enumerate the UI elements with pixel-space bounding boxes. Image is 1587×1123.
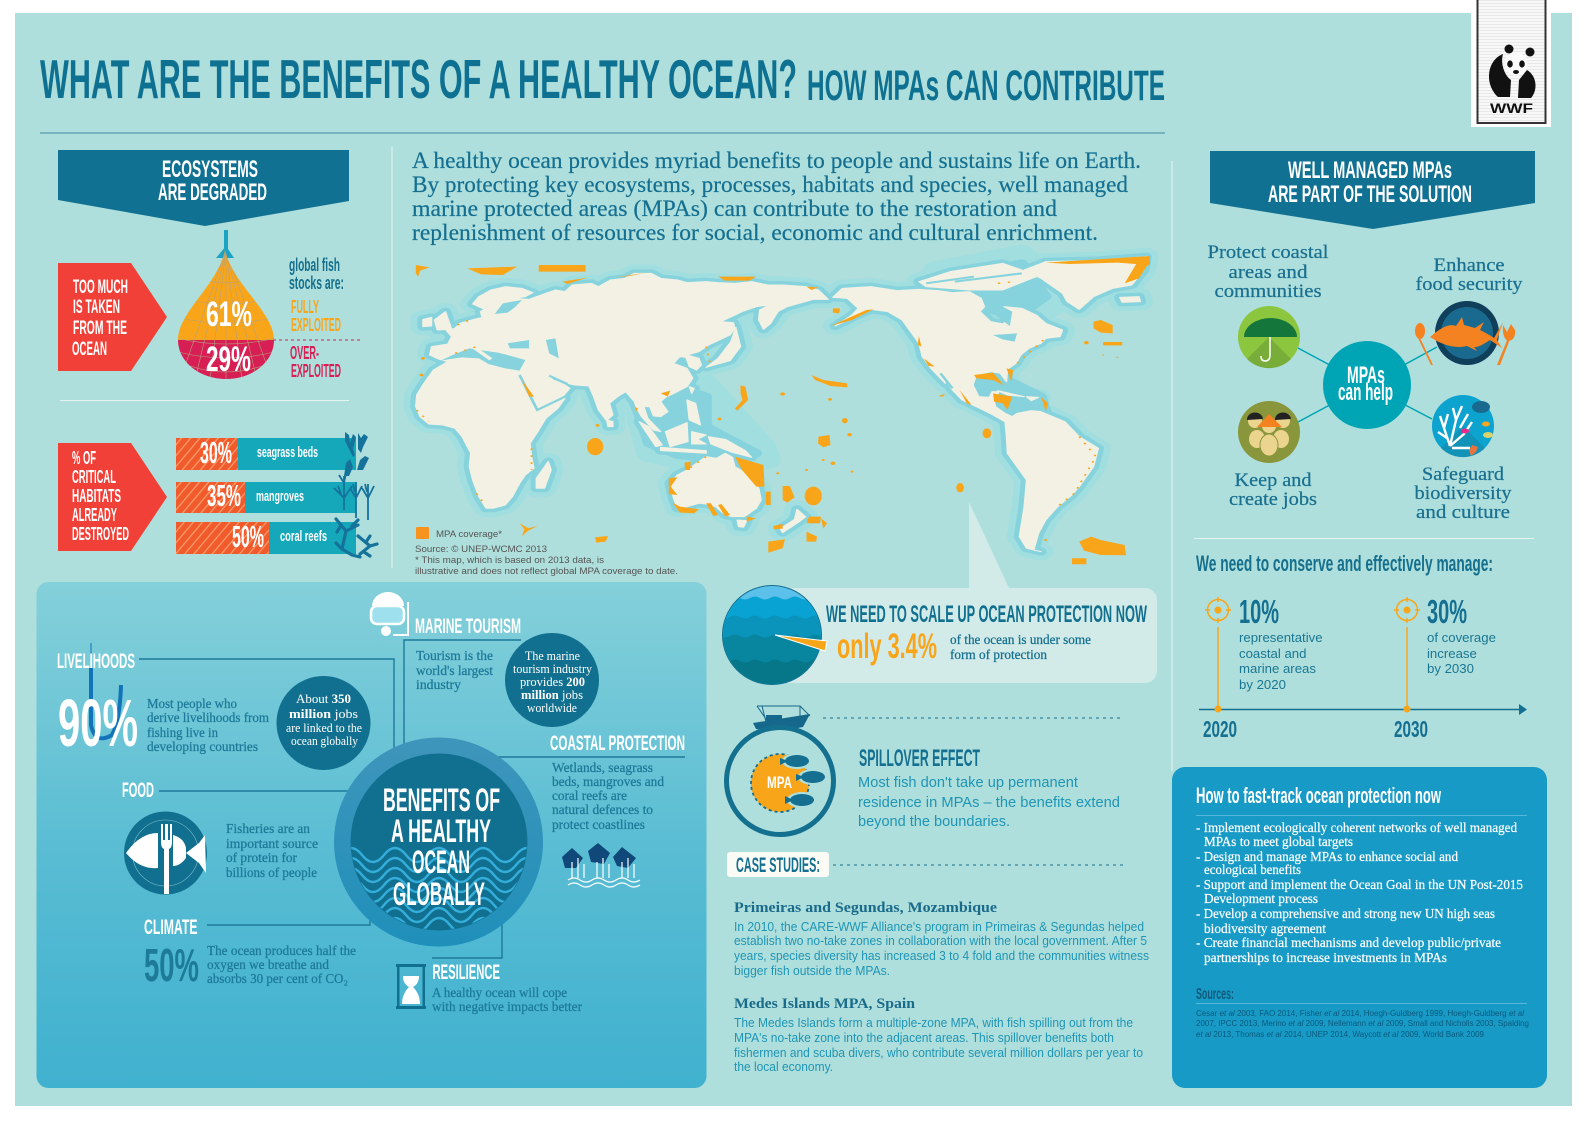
food [122,779,318,894]
callout: scale up ocean protection: only 3.4% [837,627,937,666]
icon: coral and turtle [1432,395,1494,457]
central circle: GLOBALLY [393,876,485,912]
case study: Mozambique: Primeiras and Segundas, Mozambique [734,900,998,916]
fishing net chart: 61% [206,295,252,334]
case study: Mozambique: bigger fish outside the MPAs. [734,964,890,978]
bar: coral reefs: 50% [232,519,264,554]
panel: benefits of a healthy ocean [36,582,706,1088]
pie chart: 3.4% [720,585,830,690]
targets timeline: 10% [1239,593,1279,630]
intro text: replenishment of resources for social, economic and cultural enrichment. [412,220,1098,245]
arrow: too much is taken: FROM THE [73,318,127,339]
climate: The ocean produces half the [207,943,356,958]
benefit: food security: Enhance [1434,255,1504,276]
action list: - Create financial mechanisms and develop public/private [1196,936,1501,951]
stat bubble: 200 million jobs: million jobs [521,688,583,702]
title: HOW MPAs CAN CONTRIBUTE [807,62,1165,110]
fish stock labels: EXPLOITED [291,315,341,335]
livelihoods: developing countries [147,739,258,754]
benefit: biodiversity [1414,395,1512,523]
bar: seagrass beds: seagrass beds [257,444,318,461]
targets timeline: 2030 [1394,716,1428,742]
livelihoods [57,643,370,770]
banner: ecosystems: ARE DEGRADED [158,179,267,206]
stat bubble: 350 million jobs [276,676,370,770]
icon: fish on plate [124,812,207,894]
food: FOOD [122,779,154,802]
hub: MPAs can help: MPAs [1347,362,1385,389]
benefit: protect coastal areas: communities [1214,281,1322,302]
icon: hourglass [396,964,426,1009]
icon: umbrella [1238,306,1300,368]
intro text [412,148,1141,245]
benefit: biodiversity: biodiversity [1414,483,1512,504]
arrow: critical habitats destroyed: CRITICAL [72,467,116,487]
map legend [415,527,678,576]
targets timeline: representative [1239,630,1323,645]
arrow: critical habitats destroyed: % OF [72,448,96,468]
case study: Mozambique: In 2010, the CARE-WWF Alliance's program in Primeiras & Segundas helped [734,920,1144,934]
case study: Mozambique [734,900,1149,978]
livelihoods: fishing live in [147,725,218,740]
arrow: critical habitats destroyed: ALREADY [72,505,117,525]
banner: solution: WELL MANAGED MPAs [1288,157,1452,184]
map legend: * This map, which is based on 2013 data, is [415,555,604,565]
callout: scale up ocean protection [720,502,1157,690]
central circle [334,738,543,946]
action list [1196,821,1523,966]
action list: ecological benefits [1204,863,1301,878]
benefit: food security [1415,255,1523,365]
stat bubble: 200 million jobs: provides 200 [520,675,585,689]
icon: houses in wetlands [562,843,640,887]
benefit: protect coastal areas: areas and [1228,262,1308,283]
action list: MPAs to meet global targets [1204,835,1353,850]
targets timeline: of coverage [1427,630,1496,645]
arrow: critical habitats destroyed [58,443,167,551]
case studies: CASE STUDIES: [736,854,820,877]
stat bubble: 200 million jobs: The marine [525,649,580,663]
central circle: BENEFITS OF [383,782,500,818]
benefit: protect coastal areas [1208,242,1328,368]
targets timeline: by 2020 [1239,677,1286,692]
hub: MPAs can help [1323,341,1411,429]
case study: Spain: MPA's no-take zone into the adjacent areas. This spillover benefits both [734,1031,1114,1045]
stat bubble: 350 million jobs: million jobs [289,706,358,721]
case study: Mozambique: establish two no-take zones in collaboration with the local government. After 5 [734,934,1147,948]
fish stock labels: stocks are: [289,273,344,293]
climate: CLIMATE [144,916,198,939]
fish stock labels [273,255,360,381]
arrow: critical habitats destroyed: HABITATS [72,486,121,506]
icon: fish plate [1415,301,1515,365]
benefit: jobs: Keep and [1234,470,1312,491]
spillover effect: residence in MPAs – the benefits extend [858,794,1120,811]
food: of protein for [226,850,297,865]
case study: Spain: The Medes Islands form a multiple-zone MPA, with fish spilling out from the [734,1016,1133,1030]
case study: Spain [734,996,1143,1074]
stat bubble: 200 million jobs: worldwide [527,701,577,715]
arrow: too much is taken [58,263,167,371]
coastal protection: beds, mangroves and [552,774,664,789]
title: WHAT ARE THE BENEFITS OF A HEALTHY OCEAN? [40,48,797,110]
fish stock labels: EXPLOITED [291,361,341,381]
livelihoods: Most people who [147,696,237,711]
coastal protection [550,732,685,887]
benefit: biodiversity: Safeguard [1422,464,1505,485]
banner: solution [1210,151,1535,229]
bar: seagrass beds [176,432,369,476]
food: important source [226,836,318,851]
banner: ecosystems [58,150,349,226]
logo: WWF panda: WWF [1490,100,1534,116]
sources: et al 2013, Thomas et al 2014, UNEP 2014, Waycott et al 2009, World Bank 2009 [1196,1030,1484,1039]
map legend: illustrative and does not reflect global MPA coverage to date. [415,566,678,576]
spillover effect: SPILLOVER EFFECT [859,745,980,772]
case study: Spain: the local economy. [734,1060,833,1074]
arrow: too much is taken: OCEAN [72,339,107,360]
targets timeline: 30% [1427,593,1467,630]
livelihoods: LIVELIHOODS [57,650,135,673]
intro text: marine protected areas (MPAs) can contribute to the restoration and [412,196,1058,221]
fishing net chart [178,230,274,379]
bar: mangroves: mangroves [256,488,304,505]
arrow: too much is taken: TOO MUCH [73,277,128,298]
spillover effect: beyond the boundaries. [858,813,1010,830]
icon: MPA spillover ring: MPA [767,773,792,792]
case studies [727,852,1149,1074]
panel: ecosystems are degraded [58,150,377,557]
bar: coral reefs: coral reefs [280,528,327,545]
marine tourism: MARINE TOURISM [415,615,521,638]
livelihoods: derive livelihoods from [147,710,269,725]
benefit: jobs [1229,401,1317,510]
icon: MPA spillover ring [726,728,834,834]
targets timeline: coastal and [1239,646,1306,661]
marine tourism: world's largest [416,663,493,678]
climate [144,916,356,991]
climate: absorbs 30 per cent of CO₂ [207,971,348,986]
map legend: Source: © UNEP-WCMC 2013 [415,544,547,554]
action list: - Develop a comprehensive and strong new UN high seas [1196,907,1495,922]
map legend: MPA coverage* [436,529,502,539]
banner: ecosystems: ECOSYSTEMS [162,156,258,183]
logo: WWF panda [1471,0,1551,127]
targets timeline: by 2030 [1427,661,1474,676]
benefit: biodiversity: and culture [1416,502,1510,523]
stat bubble: 350 million jobs: are linked to the [286,720,362,735]
icon: boat [753,706,810,730]
benefit: food security: food security [1416,274,1523,295]
target icon 2020 [1205,597,1231,709]
central circle: A HEALTHY [391,813,491,849]
callout: scale up ocean protection: form of protection [950,648,1047,663]
action list: - Design and manage MPAs to enhance social and [1196,850,1458,865]
case study: Spain: Medes Islands MPA, Spain [734,996,915,1012]
fish stock labels: FULLY [291,297,319,317]
case study: Spain: fishermen and scuba divers, who contribute several million dollars per year to [734,1046,1143,1060]
action list: - Implement ecologically coherent networks of well managed [1196,821,1517,836]
climate: 50% [144,939,199,991]
marine tourism: industry [416,677,461,692]
benefit: jobs: create jobs [1229,489,1317,510]
resilience [396,961,582,1014]
coastal protection: Wetlands, seagrass [552,760,653,775]
spillover effect [726,706,1124,834]
intro text: By protecting key ecosystems, processes, habitats and species, well managed [412,172,1129,197]
arrow: too much is taken: IS TAKEN [73,297,120,318]
targets timeline [1196,551,1527,742]
action list: partnerships to increase investments in MPAs [1204,951,1447,966]
fishing net chart: 29% [206,340,251,379]
sources [1196,986,1529,1039]
resilience: with negative impacts better [432,999,582,1014]
sources: 2007, IPCC 2013, Merino et al 2009, Nellemann et al 2009, Small and Nicholls 2003, Spalding [1196,1019,1529,1028]
spillover effect: Most fish don't take up permanent [858,774,1079,791]
targets timeline: 2020 [1203,716,1237,742]
food: Fisheries are an [226,821,310,836]
coastal protection: natural defences to [552,802,653,817]
targets timeline: increase [1427,646,1477,661]
benefit: protect coastal areas: Protect coastal [1208,242,1328,263]
bar: mangroves [176,473,374,520]
icon: dive mask [371,592,408,636]
bar: seagrass beds: 30% [200,435,232,470]
action list: biodiversity agreement [1204,922,1326,937]
sources: Sources: [1196,986,1234,1003]
callout: scale up ocean protection: of the ocean is under some [950,633,1091,648]
action list: - Support and implement the Ocean Goal in the UN Post-2015 [1196,878,1523,893]
coastal protection: coral reefs are [552,788,627,803]
central circle: OCEAN [412,844,470,880]
panel: how to fast-track ocean protection [1172,767,1547,1088]
fish stock labels: OVER- [290,343,319,363]
food: billions of people [226,865,317,880]
target icon 2030 [1394,597,1420,709]
arrow: critical habitats destroyed: DESTROYED [72,524,129,544]
world map of MPA coverage [416,253,1150,564]
resilience: A healthy ocean will cope [432,985,567,1000]
stat bubble: 200 million jobs [505,633,599,727]
fish stock labels: global fish [289,255,340,275]
timeline arrow [1199,704,1527,715]
callout: scale up ocean protection: WE NEED TO SCALE UP OCEAN PROTECTION NOW [826,601,1147,628]
hub: MPAs can help: can help [1338,379,1393,406]
stat bubble: 200 million jobs: tourism industry [513,662,593,676]
coastal protection: COASTAL PROTECTION [550,732,685,755]
case study: Mozambique: years, species diversity has increased 3 to 4 fold and the communities witness [734,949,1149,963]
coastal protection: protect coastlines [552,817,645,832]
icon: people [1238,401,1300,463]
targets timeline: marine areas [1239,661,1316,676]
stat bubble: 350 million jobs: About 350 [296,691,351,706]
climate: oxygen we breathe and [207,957,329,972]
marine tourism [371,592,599,727]
panel: well managed MPAs [1208,151,1535,523]
bar: coral reefs [176,519,377,557]
livelihoods: 90% [58,686,138,761]
stat bubble: 350 million jobs: ocean globally [291,733,358,748]
marine tourism: Tourism is the [416,648,493,663]
action list: Development process [1204,892,1318,907]
bar: mangroves: 35% [207,478,241,513]
intro text: A healthy ocean provides myriad benefits to people and sustains life on Earth. [412,148,1141,173]
resilience: RESILIENCE [432,961,500,984]
sources: Cesar et al 2003, FAO 2014, Fisher et al 2014, Hoegh-Guldberg 1999, Hoegh-Guldberg et al [1196,1009,1524,1018]
